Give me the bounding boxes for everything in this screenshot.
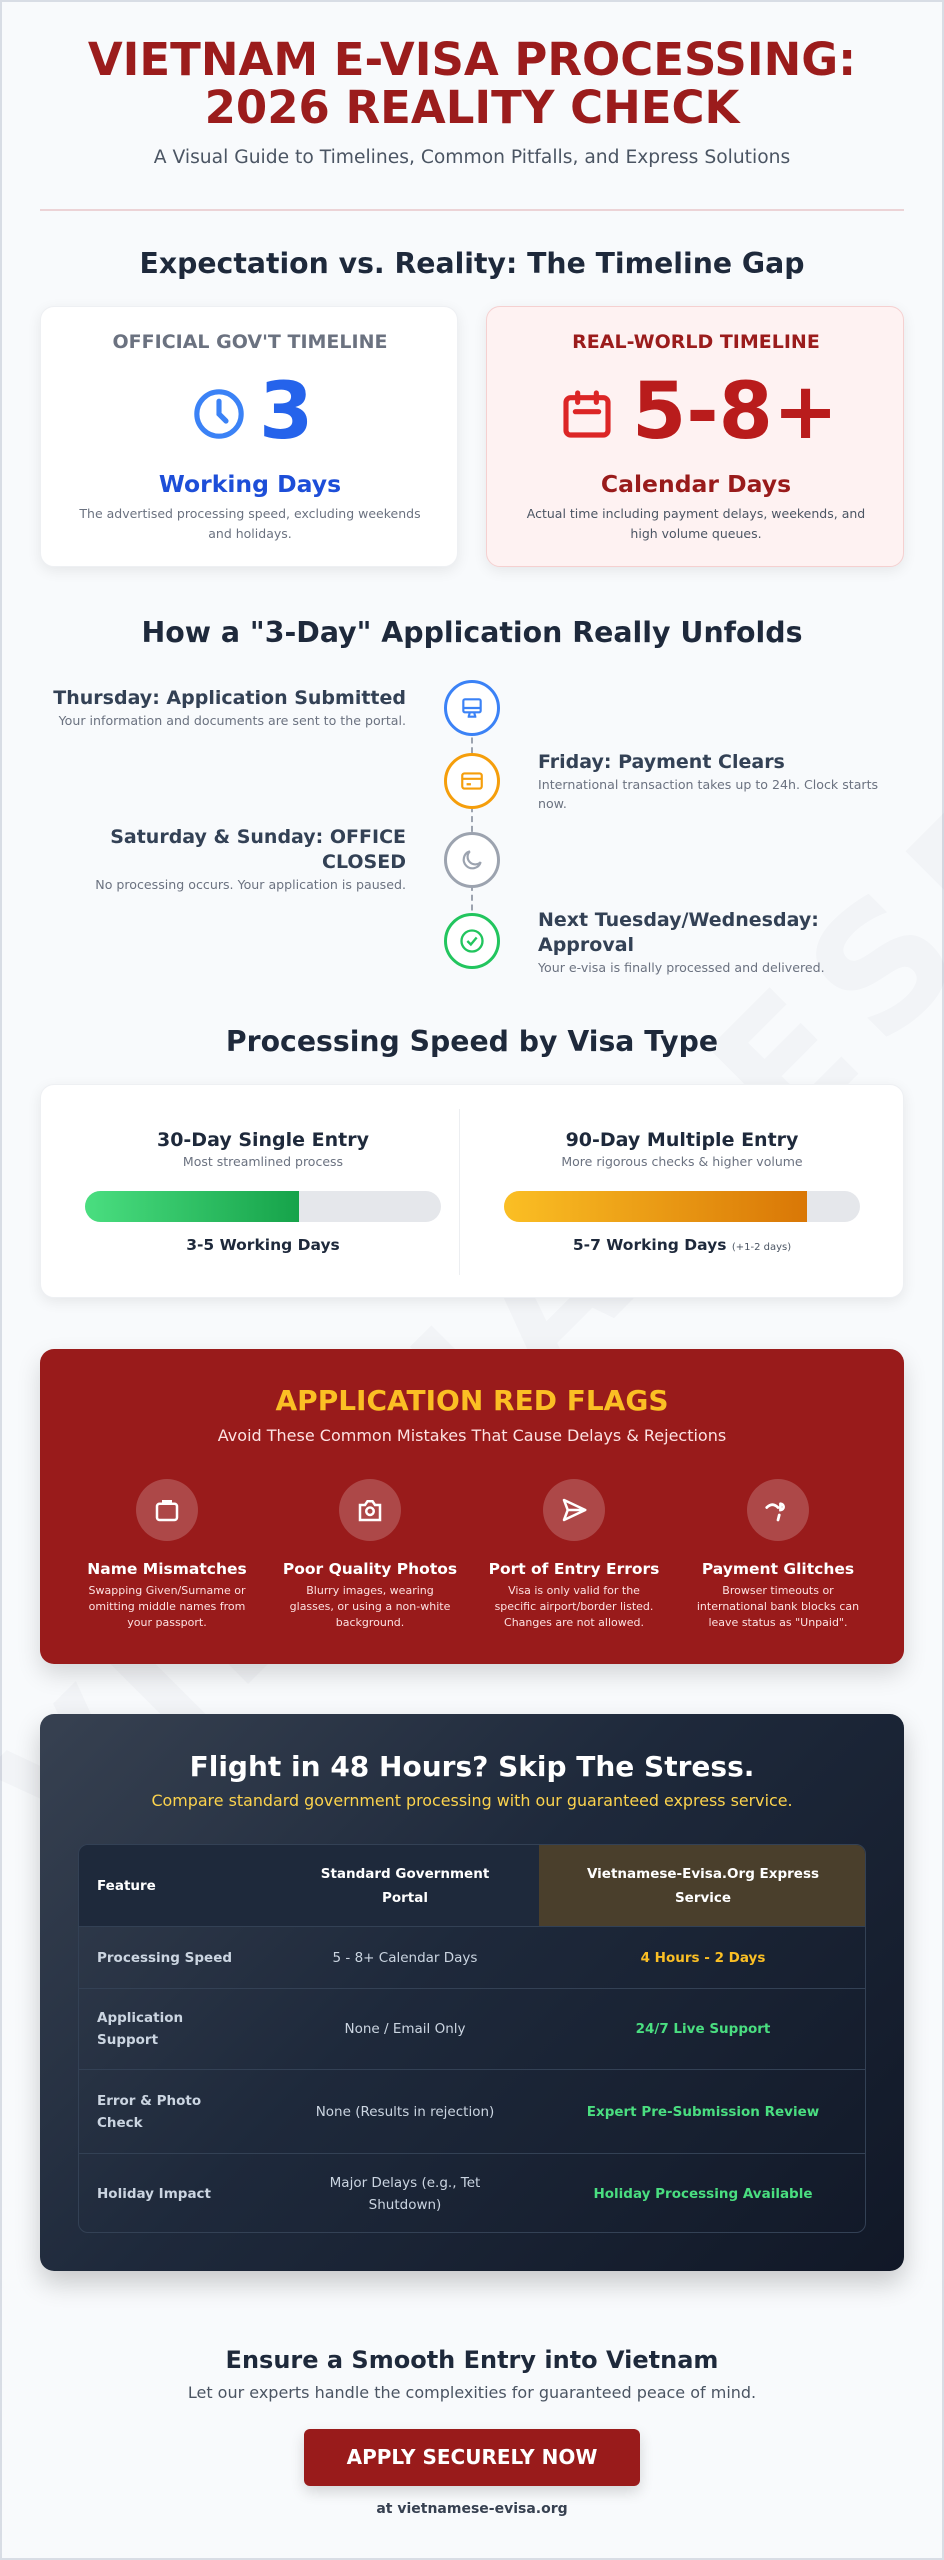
row: support bbox=[79, 1988, 867, 2069]
heading: APPLICATION RED FLAGS bbox=[276, 1384, 668, 1417]
unit: Calendar Days bbox=[601, 470, 791, 498]
flag: name mismatches: Swapping Given/Surname or omitting middle names from your passport. bbox=[89, 1584, 245, 1629]
subheading: Avoid These Common Mistakes That Cause Delays & Rejections bbox=[218, 1426, 726, 1445]
step: friday: Friday: Payment Clears bbox=[538, 751, 785, 773]
step: approval: Approval bbox=[538, 934, 634, 956]
flag: name mismatches bbox=[87, 1479, 247, 1629]
table header: Vietnamese-Evisa.Org Express bbox=[587, 1866, 819, 1882]
step: approval: Your e-visa is finally processed and delivered. bbox=[538, 960, 825, 975]
row: error check: Expert Pre-Submission Review bbox=[587, 2104, 819, 2120]
row: holiday: Holiday Impact bbox=[97, 2186, 211, 2202]
step: approval: Next Tuesday/Wednesday: bbox=[538, 909, 819, 931]
table header: Service bbox=[675, 1890, 731, 1906]
step: friday: International transaction takes up to 24h. Clock starts now. bbox=[538, 777, 878, 811]
flag: name mismatches: Name Mismatches bbox=[87, 1560, 247, 1578]
step: friday bbox=[538, 751, 878, 811]
step: weekend: No processing occurs. Your application is paused. bbox=[95, 877, 406, 892]
comparison table bbox=[78, 1844, 866, 2233]
icon: clock bbox=[194, 389, 244, 439]
big number: 3 bbox=[259, 367, 313, 457]
panel: express comparison bbox=[40, 1714, 904, 2271]
row: processing speed bbox=[79, 1926, 867, 1988]
bar: 30-day: 30-Day Single Entry bbox=[157, 1129, 369, 1151]
flag: payment bbox=[697, 1479, 859, 1629]
CTA subtext: Let our experts handle the complexities for guaranteed peace of mind. bbox=[188, 2383, 756, 2402]
bar: 30-day: 3-5 Working Days bbox=[186, 1236, 340, 1254]
row: error check: None (Results in rejection) bbox=[316, 2104, 494, 2120]
heading: expectation vs reality: Expectation vs. Reality: The Timeline Gap bbox=[140, 247, 804, 280]
row: processing speed: 4 Hours - 2 Days bbox=[641, 1950, 765, 1966]
title: VIETNAM E-VISA PROCESSING: bbox=[88, 33, 856, 86]
subheading: Compare standard government processing with our guaranteed express service. bbox=[151, 1791, 793, 1810]
heading: timeline: How a "3-Day" Application Really Unfolds bbox=[142, 616, 802, 649]
icon: monitor bbox=[444, 680, 500, 736]
row: support: None / Email Only bbox=[344, 2021, 466, 2037]
row: error check: Check bbox=[97, 2114, 143, 2130]
icon: card bbox=[444, 753, 500, 809]
table header bbox=[79, 1845, 867, 1926]
row: support: Application bbox=[97, 2010, 183, 2026]
title bbox=[88, 33, 856, 134]
heading: Flight in 48 Hours? Skip The Stress. bbox=[190, 1750, 754, 1783]
flag: photos: Blurry images, wearing glasses, or using a non-white background. bbox=[290, 1584, 450, 1629]
row: holiday: Major Delays (e.g., Tet bbox=[330, 2175, 480, 2191]
step: thursday bbox=[53, 687, 406, 728]
subtitle: A Visual Guide to Timelines, Common Pitfalls, and Express Solutions bbox=[154, 147, 790, 168]
title: 2026 REALITY CHECK bbox=[205, 81, 739, 134]
flag: port of entry: Port of Entry Errors bbox=[489, 1560, 659, 1578]
CTA url: at vietnamese-evisa.org bbox=[376, 2501, 568, 2517]
bar: 30-day: Most streamlined process bbox=[183, 1154, 343, 1169]
bar: 90-day: 90-Day Multiple Entry bbox=[566, 1129, 798, 1151]
row: holiday: Shutdown) bbox=[369, 2197, 441, 2213]
flag: port of entry bbox=[489, 1479, 659, 1629]
CTA button bbox=[304, 2429, 640, 2486]
heading: processing speed: Processing Speed by Visa Type bbox=[226, 1025, 718, 1058]
row: error check: Error & Photo bbox=[97, 2092, 201, 2108]
bar: 90-day: 5-7 Working Days (+1-2 days) bbox=[573, 1236, 791, 1254]
CTA heading: Ensure a Smooth Entry into Vietnam bbox=[226, 2346, 718, 2374]
panel: real-world timeline bbox=[486, 306, 904, 567]
panel: visa speed chart bbox=[40, 1084, 904, 1298]
panel: official timeline bbox=[40, 306, 458, 567]
timeline bbox=[53, 680, 878, 975]
bar: 90-day: More rigorous checks & higher volume bbox=[561, 1154, 803, 1169]
label: REAL-WORLD TIMELINE bbox=[572, 331, 820, 353]
icon: moon bbox=[444, 832, 500, 888]
table header: Standard Government bbox=[321, 1866, 489, 1882]
row: support: Support bbox=[97, 2032, 158, 2048]
icon: calendar bbox=[563, 390, 611, 438]
row: holiday: Holiday Processing Available bbox=[593, 2186, 813, 2202]
table header: Portal bbox=[382, 1890, 428, 1906]
step: weekend bbox=[95, 826, 406, 892]
description: The advertised processing speed, excluding weekends and holidays. bbox=[79, 506, 421, 541]
bar: 90-day bbox=[504, 1129, 860, 1254]
step: approval bbox=[538, 909, 825, 975]
step: weekend: CLOSED bbox=[322, 851, 406, 873]
row: processing speed: Processing Speed bbox=[97, 1950, 232, 1966]
step: thursday: Thursday: Application Submitted bbox=[53, 687, 406, 709]
flag: payment: Payment Glitches bbox=[702, 1560, 854, 1578]
flag: photos: Poor Quality Photos bbox=[283, 1560, 457, 1578]
panel: red flags bbox=[40, 1349, 904, 1664]
step: weekend: Saturday & Sunday: OFFICE bbox=[110, 826, 406, 848]
big number: 5-8+ bbox=[632, 367, 838, 457]
flag: port of entry: Visa is only valid for the specific airport/border listed. Changes are not allowed. bbox=[495, 1584, 653, 1629]
unit: Working Days bbox=[159, 470, 341, 498]
row: processing speed: 5 - 8+ Calendar Days bbox=[333, 1950, 477, 1966]
row: support: 24/7 Live Support bbox=[636, 2021, 770, 2037]
label: OFFICIAL GOV'T TIMELINE bbox=[113, 331, 387, 353]
step: thursday: Your information and documents are sent to the portal. bbox=[59, 713, 406, 728]
row: holiday bbox=[79, 2153, 867, 2234]
flag: photos bbox=[283, 1479, 457, 1629]
bar: 30-day bbox=[85, 1129, 441, 1254]
CTA button: APPLY SECURELY NOW bbox=[347, 2445, 597, 2469]
row: error check bbox=[79, 2069, 867, 2153]
table header: Feature bbox=[97, 1878, 156, 1894]
icon: check bbox=[444, 913, 500, 969]
description: Actual time including payment delays, weekends, and high volume queues. bbox=[527, 506, 865, 541]
flag: payment: Browser timeouts or international bank blocks can leave status as "Unpaid". bbox=[697, 1584, 859, 1629]
